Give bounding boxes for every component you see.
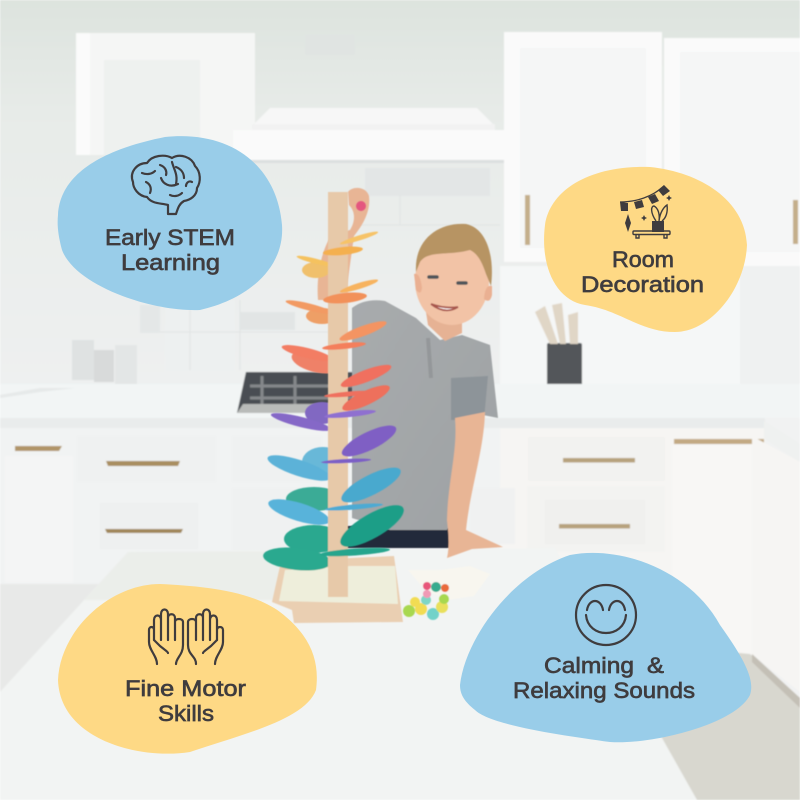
boy: jeans — [345, 526, 450, 548]
marbles and drawstring bag — [403, 566, 490, 620]
toy: tray inner — [279, 566, 398, 604]
toy: wooden tray — [272, 556, 403, 623]
toy: back leaves — [284, 262, 344, 553]
boy: shirt placket — [428, 338, 431, 378]
heading: Fine Motor Skills: Skills — [158, 701, 214, 726]
heading: Calming and Relaxing Sounds: & — [647, 653, 664, 678]
panel: Early STEM Learning — [58, 136, 282, 310]
toy: pink marble — [356, 201, 366, 211]
icon: open hands — [149, 610, 223, 664]
panel background blob — [58, 136, 282, 310]
toy: right leaves — [320, 230, 409, 558]
boy: ears — [414, 274, 492, 301]
toy: wooden pole — [328, 192, 348, 597]
panel background blob — [544, 167, 747, 332]
icon: smiling face — [576, 585, 636, 645]
boy: shirt pocket — [451, 376, 488, 420]
heading: Early STEM Learning: Learning — [121, 250, 220, 275]
boy: grey shirt — [352, 300, 498, 530]
marbles in bag — [423, 582, 449, 592]
heading: Fine Motor Skills: Fine Motor — [125, 676, 246, 701]
heading: Early STEM Learning — [105, 225, 235, 275]
boy: neck — [426, 312, 462, 341]
panel background blob — [460, 553, 751, 742]
heading: Calming and Relaxing Sounds: Calming — [544, 653, 634, 678]
toy: left leaves — [262, 254, 334, 573]
heading: Room Decoration: Room — [612, 247, 674, 272]
heading: Fine Motor Skills — [125, 676, 246, 726]
icon: bunting and shelf with plant — [620, 185, 672, 238]
heading: Calming and Relaxing Sounds: Relaxing Sounds — [513, 678, 695, 703]
boy: face — [415, 237, 489, 325]
boy playing with the toy — [318, 188, 503, 558]
panel: Fine Motor Skills — [58, 584, 317, 754]
panel: Calming and Relaxing Sounds — [460, 553, 751, 742]
boy: eyes and smile — [429, 277, 466, 283]
heading: Room Decoration — [581, 247, 704, 297]
heading: Room Decoration: Decoration — [581, 272, 704, 297]
panel background blob — [58, 584, 317, 754]
heading: Calming and Relaxing Sounds — [513, 653, 695, 703]
boy: hair — [416, 224, 492, 286]
bag — [408, 566, 490, 600]
heading: Early STEM Learning: Early STEM — [105, 225, 235, 250]
marble tree toy — [262, 192, 409, 623]
loose marbles — [403, 590, 449, 620]
panel: Room Decoration — [544, 167, 747, 332]
boy: left arm on table — [447, 412, 503, 558]
boy: raised arm and hand — [318, 188, 369, 300]
icon: brain — [132, 156, 200, 214]
